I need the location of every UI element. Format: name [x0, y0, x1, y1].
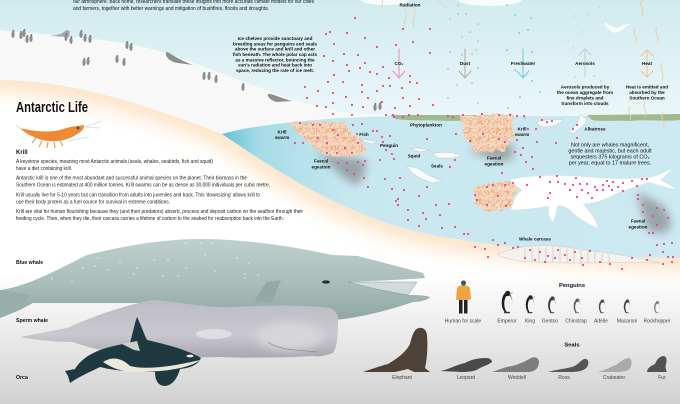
blue whale — [0, 239, 430, 320]
swarm 1 texture — [290, 122, 367, 157]
fur seal — [647, 356, 667, 372]
penguin swimming — [537, 119, 563, 127]
weddell seal — [492, 357, 539, 372]
aerosols note — [557, 84, 613, 106]
krill text: A keystone species, meaning most Antarctic animals (seals, whales, seabirds, fish and squid) — [16, 159, 213, 165]
atmosphere labels: Dust — [460, 61, 471, 66]
krill text: have a diet containing krill. — [16, 166, 72, 172]
ocean labels: Whale carcass — [519, 236, 551, 242]
flying bird — [604, 22, 631, 33]
sand band — [0, 76, 680, 254]
krill text: Antarctic krill is one of the most abundant and successful animal species on the planet. Their biomass in the — [16, 176, 247, 182]
tail fluke — [0, 290, 30, 318]
orca — [65, 317, 201, 386]
ocean labels: Faecal — [314, 158, 328, 164]
krill text: Krill — [16, 150, 28, 156]
swarm 2 — [460, 115, 514, 153]
sperm whale head highlight — [256, 322, 324, 350]
krill text: feeding cycle. Then, when they die, their carcass carries a lifetime of carbon to the seabed for reabsorption back into the Earth. — [16, 216, 284, 222]
seal — [433, 152, 462, 158]
ocean labels: egestion — [629, 224, 648, 230]
seal labels: Leopard — [457, 375, 475, 381]
whale labels: Sperm whale — [16, 318, 48, 324]
atmosphere labels: Freshwater — [511, 61, 535, 66]
seal labels: Weddell — [508, 375, 526, 381]
seal on ice — [268, 94, 292, 102]
ocean labels: egestion — [485, 162, 504, 166]
heat waves — [629, 0, 664, 127]
faecal shadows — [316, 143, 672, 233]
seal labels — [392, 342, 666, 381]
aerosols note: Aerosols produced by — [561, 84, 610, 90]
penguin labels: Macaroni — [617, 318, 637, 324]
heat note — [626, 84, 668, 100]
ross seal — [548, 359, 588, 372]
whale silhouette — [510, 169, 675, 228]
seal diving — [407, 166, 442, 183]
whales note: per year, equal to 17 mature trees. — [569, 160, 651, 166]
dust dots — [448, 5, 478, 103]
ocean labels: Faecal — [487, 156, 501, 160]
penguin labels: King — [525, 318, 535, 324]
albatross diving — [569, 114, 587, 133]
ice shelves note: Ice shelves provide sanctuary and — [238, 36, 313, 41]
ocean labels: Squid — [408, 154, 421, 158]
intro text: and farmers, together with better warnings and mitigation of bushfires, floods and droughts. — [73, 6, 269, 12]
whales note — [568, 142, 652, 166]
whales note: Not only are whales magnificent, — [571, 142, 649, 148]
krill text: Krill usually live for 5-10 years but can transition from adults into juveniles and back. This 'downsizing' allows krill to — [16, 192, 260, 198]
penguin labels: Penguins — [559, 283, 585, 289]
atmosphere labels: Aerosols — [575, 61, 595, 66]
freshwater arrow — [517, 49, 529, 78]
ice shelves note: above the surface and krill and other — [235, 47, 315, 52]
penguin labels: Human for scale — [445, 318, 481, 324]
eye — [322, 280, 330, 284]
ocean labels — [275, 122, 648, 242]
heat note: Southern Ocean — [629, 96, 665, 100]
heat note: Heat is emitted and — [626, 84, 668, 90]
seal labels: Crabeater — [603, 375, 625, 381]
seals — [363, 328, 667, 372]
seal on ice — [166, 52, 193, 65]
whale labels: Blue whale — [16, 260, 43, 266]
atmosphere labels — [395, 2, 652, 66]
atmosphere labels: CO₂ — [395, 61, 403, 66]
ice shelves note: fish beneath. The whole polar cap acts — [233, 52, 318, 57]
swarm 1 — [290, 122, 367, 157]
ocean labels: Seals — [431, 164, 443, 168]
ocean labels: Krill — [278, 130, 286, 134]
leopard seal — [440, 358, 492, 372]
whale labels — [16, 260, 48, 381]
white belly — [103, 359, 200, 372]
aerosol dots — [568, 7, 601, 81]
fauna on the ice — [11, 29, 382, 111]
icon: krill — [16, 121, 102, 148]
penguins — [502, 291, 661, 313]
atmosphere labels: Radiation — [400, 2, 421, 8]
eye patch — [186, 355, 194, 357]
penguin labels: Gentoo — [542, 318, 558, 324]
penguin labels: Emperor — [497, 318, 517, 324]
mouth baleen — [348, 282, 417, 295]
krill text: use their body protein as a fuel source for survival in extreme conditions. — [16, 200, 170, 206]
dust arrow — [459, 49, 471, 78]
ice shelves note: space, reducing the rate of ice melt. — [236, 68, 314, 73]
spots — [52, 243, 258, 282]
swarm 3 — [473, 180, 522, 212]
krill text: Krill are vital for human flourishing because they (and their predators) absorb, process and deposit carbon on the seafloor through their — [16, 209, 303, 215]
ocean labels: Albatross — [584, 126, 606, 132]
krill swarms — [290, 115, 522, 212]
ocean labels: swarm — [275, 135, 289, 140]
whale labels: Orca — [16, 375, 28, 381]
krill text — [16, 150, 303, 222]
ocean labels: Krill — [518, 126, 526, 132]
heat arrow — [641, 50, 653, 77]
squid — [410, 148, 430, 152]
crabeater seal — [597, 358, 632, 372]
seal on ice — [50, 30, 70, 37]
whales note: sequesters 375 kilograms of CO₂ — [570, 154, 650, 160]
swarm 3 texture — [473, 180, 522, 212]
penguin labels — [445, 283, 671, 324]
seal labels: Elephant — [392, 375, 412, 381]
ice shelves note — [233, 36, 318, 73]
atmosphere labels: Heat — [642, 61, 652, 66]
radiation arrows — [381, 0, 447, 27]
swarm 2 texture — [460, 115, 514, 153]
ice shelves note: breeding areas for penguins and seals — [233, 41, 317, 46]
sperm whale — [20, 300, 338, 358]
aerosols note: transform into clouds — [561, 101, 609, 106]
penguin groups on ice — [11, 29, 382, 111]
elephant seal — [363, 328, 430, 372]
ocean labels: Penguin — [380, 143, 398, 148]
saddle patch — [122, 341, 140, 351]
flipper — [254, 280, 281, 302]
heat note: absorbed by the — [629, 90, 665, 95]
clouds — [361, 0, 522, 6]
penguin labels: Rockhopper — [644, 318, 671, 324]
aerosols arrow — [579, 49, 591, 77]
intro text — [73, 0, 314, 12]
freshwater dots — [507, 5, 540, 118]
human for scale — [456, 280, 471, 314]
whales note: gentle and majestic, but each adult — [568, 148, 652, 154]
ocean labels: Faecal — [631, 218, 645, 224]
seal labels: Seals — [564, 342, 580, 348]
penguin labels: Adélie — [594, 318, 608, 324]
pink carbon dots — [295, 18, 673, 269]
seal labels: Ross — [558, 375, 570, 381]
phytoplankton band — [390, 114, 680, 121]
ocean labels: Fish — [359, 132, 369, 137]
ice shelves note: as a massive reflector, bouncing the — [235, 57, 315, 62]
ocean — [222, 116, 680, 258]
arrows — [381, 0, 664, 127]
ocean labels: Phytoplankton — [410, 122, 442, 128]
aerosols note: the ocean aggregate from — [557, 90, 613, 95]
ice shelf — [0, 30, 392, 140]
jaw line — [268, 342, 318, 352]
flipper — [196, 329, 232, 339]
fish — [362, 139, 378, 144]
whale carcass — [497, 245, 660, 263]
CO2 arrow — [393, 49, 405, 78]
seal labels: Fur — [658, 375, 666, 381]
aerosols note: fine droplets and — [566, 96, 604, 100]
ice shelves note: sun's radiation and heat back into — [238, 63, 312, 68]
small fauna silhouettes — [362, 22, 631, 183]
ocean labels: egestion — [312, 164, 331, 170]
background sky — [0, 0, 680, 130]
penguin labels: Chinstrap — [565, 318, 587, 324]
title: Antarctic Life — [16, 100, 88, 116]
krill text: Southern Ocean is estimated at 400 million tonnes. Krill swarms can be as dense as 30,000 individuals per cubic metre. — [16, 182, 270, 188]
ocean labels: swarm — [515, 132, 529, 137]
